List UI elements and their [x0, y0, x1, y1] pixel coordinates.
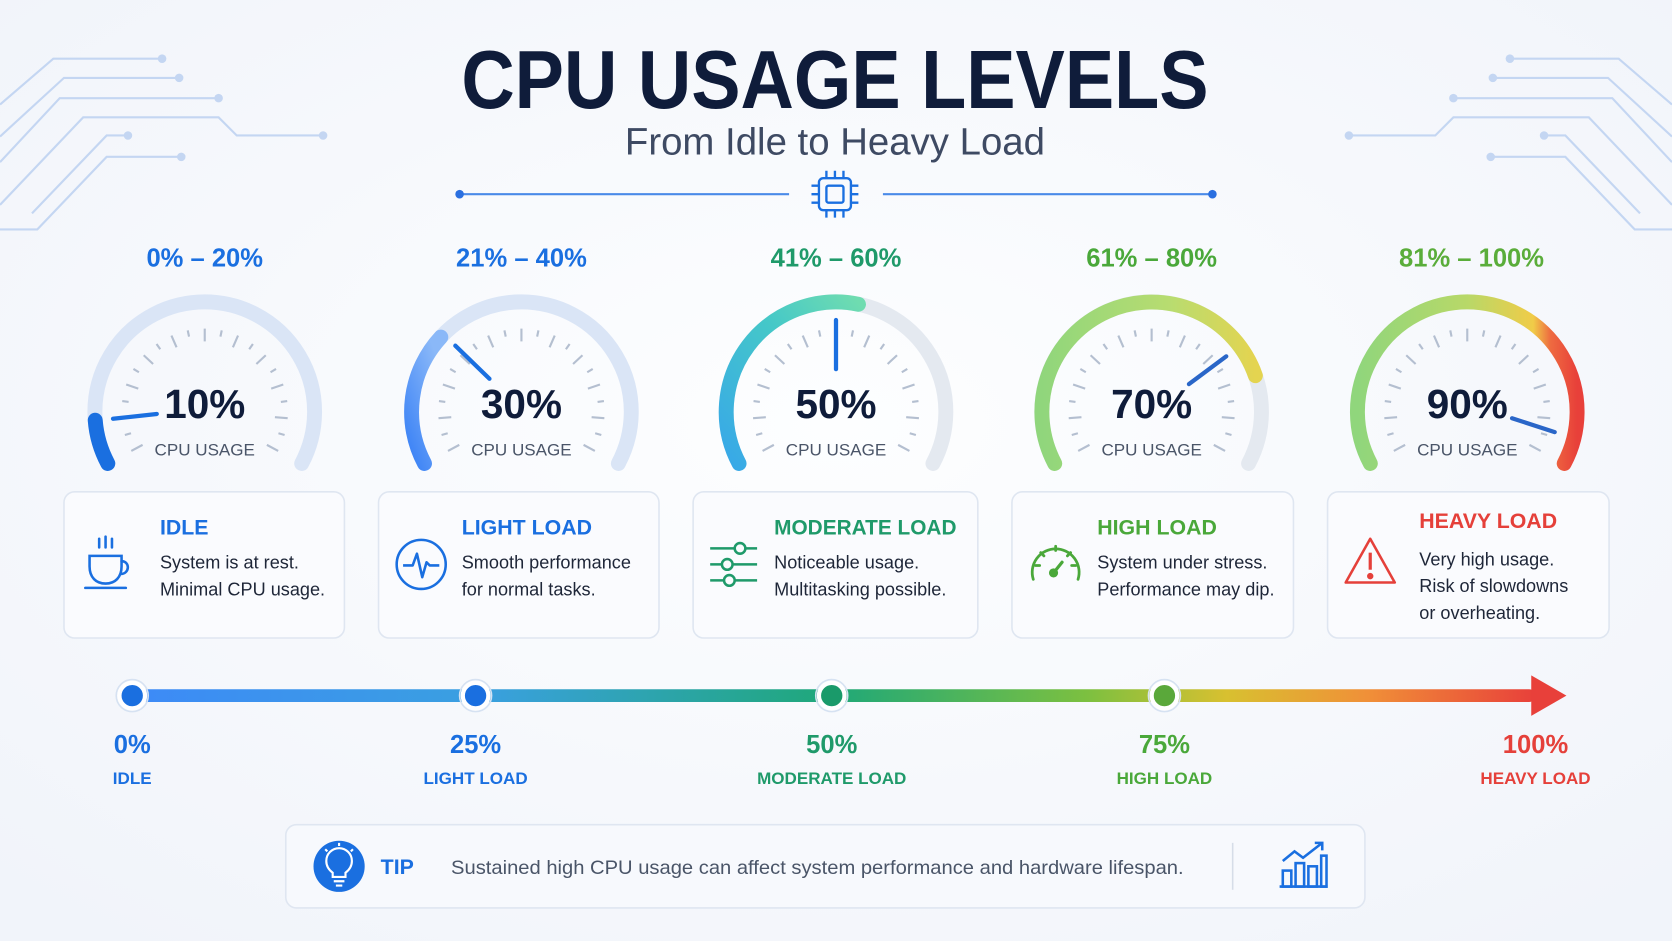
gauge: 70%: 70% [1111, 381, 1192, 427]
card: light load [379, 492, 659, 638]
gauge: 50%: 50% [795, 381, 877, 427]
subtitle: From Idle to Heavy Load [625, 121, 1045, 164]
icon: sliders [710, 543, 757, 586]
card: moderate load: Multitasking possible. [774, 579, 946, 599]
timeline labels: IDLE [113, 769, 152, 788]
gauge: 30% [412, 302, 631, 463]
timeline labels: HEAVY LOAD [1480, 769, 1591, 788]
timeline labels: 50% [806, 731, 858, 759]
gauge: 90%: 90% [1427, 381, 1508, 427]
card: moderate load: MODERATE LOAD [774, 516, 956, 540]
tip box: TIP [381, 855, 414, 879]
range labels: 0% – 20% [146, 245, 263, 273]
decoration: circuit lines left [0, 54, 327, 229]
card: high load: Performance may dip. [1097, 579, 1274, 599]
icon: chip [811, 171, 858, 218]
decoration: circuit lines right [1345, 54, 1672, 229]
timeline labels: 100% [1503, 731, 1568, 759]
gauge: 50%: CPU USAGE [786, 441, 886, 460]
gauge: 30%: 30% [481, 381, 562, 427]
range labels [146, 245, 1544, 273]
card: light load: LIGHT LOAD [462, 516, 592, 540]
timeline labels: LIGHT LOAD [424, 769, 528, 788]
icon: coffee cup [85, 537, 128, 588]
card: high load [1012, 492, 1293, 638]
timeline labels [113, 731, 1591, 788]
icon: pulse [397, 540, 446, 589]
card: heavy load: HEAVY LOAD [1419, 509, 1557, 533]
range labels: 41% – 60% [771, 245, 902, 273]
range labels: 81% – 100% [1399, 245, 1544, 273]
icon: bar chart [1280, 843, 1328, 887]
card: light load: for normal tasks. [462, 579, 596, 599]
gauge: 30%: CPU USAGE [471, 441, 572, 460]
gauge: 90% [1357, 302, 1577, 463]
card: light load: Smooth performance [462, 553, 631, 573]
card: idle: IDLE [160, 516, 209, 540]
gauge: 70%: CPU USAGE [1101, 441, 1202, 460]
gauge: 90%: CPU USAGE [1417, 441, 1517, 460]
card: heavy load [1328, 492, 1609, 638]
gauge: 10%: CPU USAGE [155, 441, 255, 460]
card: idle [64, 492, 344, 638]
range labels: 21% – 40% [456, 245, 587, 273]
gauge: 50% [726, 302, 946, 463]
timeline labels: 25% [450, 731, 501, 759]
icon: lightbulb [314, 841, 365, 892]
tip box [286, 825, 1365, 908]
timeline labels: 0% [114, 731, 151, 759]
timeline labels: HIGH LOAD [1117, 769, 1212, 788]
card: moderate load: Noticeable usage. [774, 553, 919, 573]
card: high load: System under stress. [1097, 553, 1267, 573]
gauge: 70% [1042, 302, 1261, 463]
divider with chip icon [455, 171, 1217, 218]
card: idle: System is at rest. [160, 553, 299, 573]
icon: speedometer [1032, 546, 1079, 579]
timeline labels: MODERATE LOAD [757, 769, 906, 788]
timeline bar with arrow [116, 675, 1566, 716]
card: heavy load: Risk of slowdowns [1419, 576, 1568, 596]
timeline labels: 75% [1139, 731, 1190, 759]
gauge: 10%: 10% [164, 381, 245, 427]
title: CPU USAGE LEVELS [461, 33, 1209, 126]
range labels: 61% – 80% [1086, 245, 1217, 273]
gauge: 10% [95, 302, 315, 463]
card: high load: HIGH LOAD [1097, 516, 1217, 540]
card: heavy load: Very high usage. [1419, 549, 1554, 569]
tip box: Sustained high CPU usage can affect system performance and hardware lifespan. [451, 857, 1184, 879]
card: heavy load: or overheating. [1419, 603, 1540, 623]
icon: warning [1346, 539, 1395, 583]
card: moderate load [693, 492, 978, 638]
card: idle: Minimal CPU usage. [160, 579, 325, 599]
